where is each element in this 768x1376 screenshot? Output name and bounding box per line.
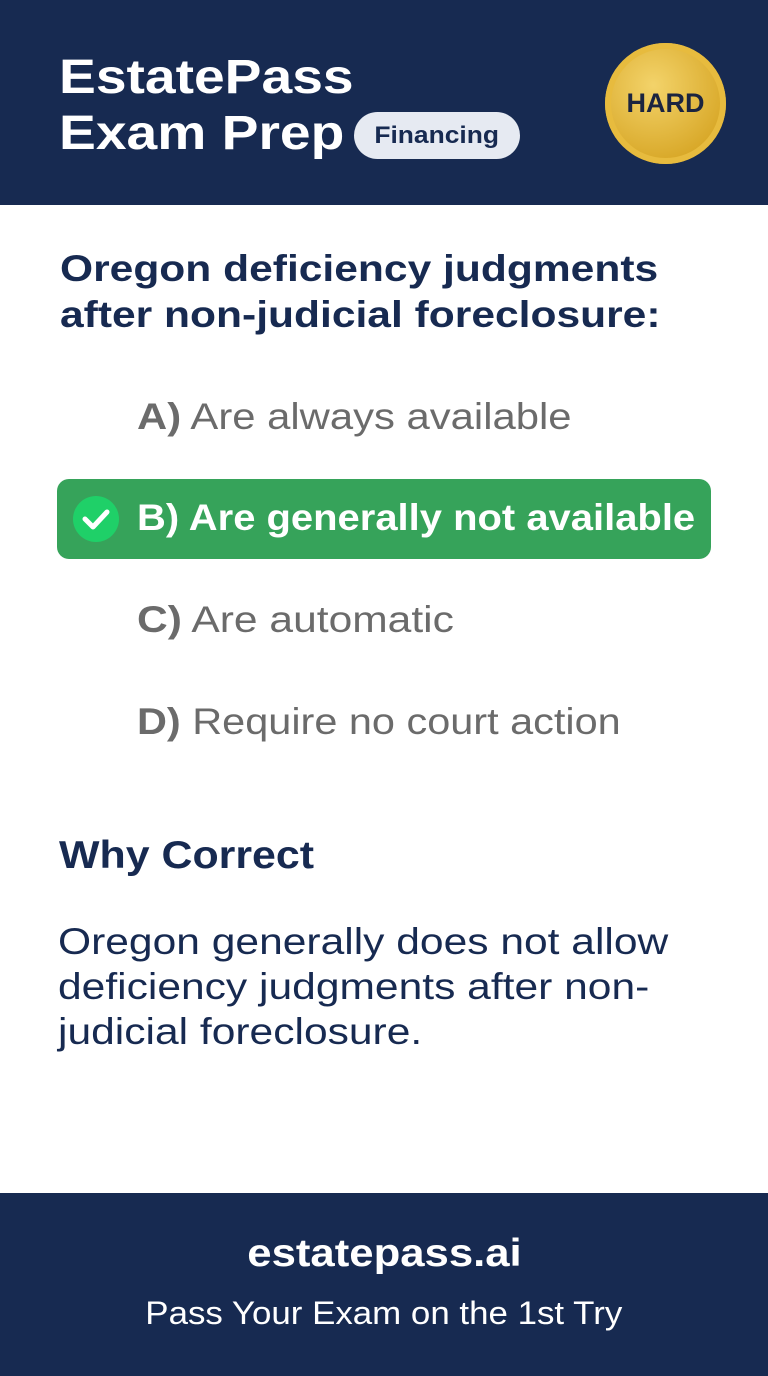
option C: C) Are automatic [137,599,454,640]
title: Exam Prep [59,107,344,160]
badge: HARD [605,43,726,164]
tag: Financing [354,112,520,159]
tag: Financing: Financing [375,122,499,149]
question: after non-judicial foreclosure: [60,294,661,335]
question: Oregon deficiency judgments [60,248,658,289]
option B correct [57,479,711,559]
explanation: judicial foreclosure. [58,1011,422,1052]
footer url: estatepass.ai [247,1232,521,1275]
option B correct: B) Are generally not available [137,497,695,538]
explanation [56,921,668,1052]
question [60,248,661,335]
title [59,51,354,160]
option D: D) Require no court action [137,701,621,742]
icon: check [73,496,119,542]
tagline: Pass Your Exam on the 1st Try [146,1295,622,1331]
footer [0,1193,768,1376]
explanation: deficiency judgments after non- [58,966,649,1007]
title: EstatePass [59,51,354,104]
header [0,0,768,205]
badge: HARD: HARD [626,88,704,118]
explanation: Oregon generally does not allow [58,921,668,962]
heading: Why Correct: Why Correct [59,834,314,877]
option A: A) Are always available [137,396,572,437]
